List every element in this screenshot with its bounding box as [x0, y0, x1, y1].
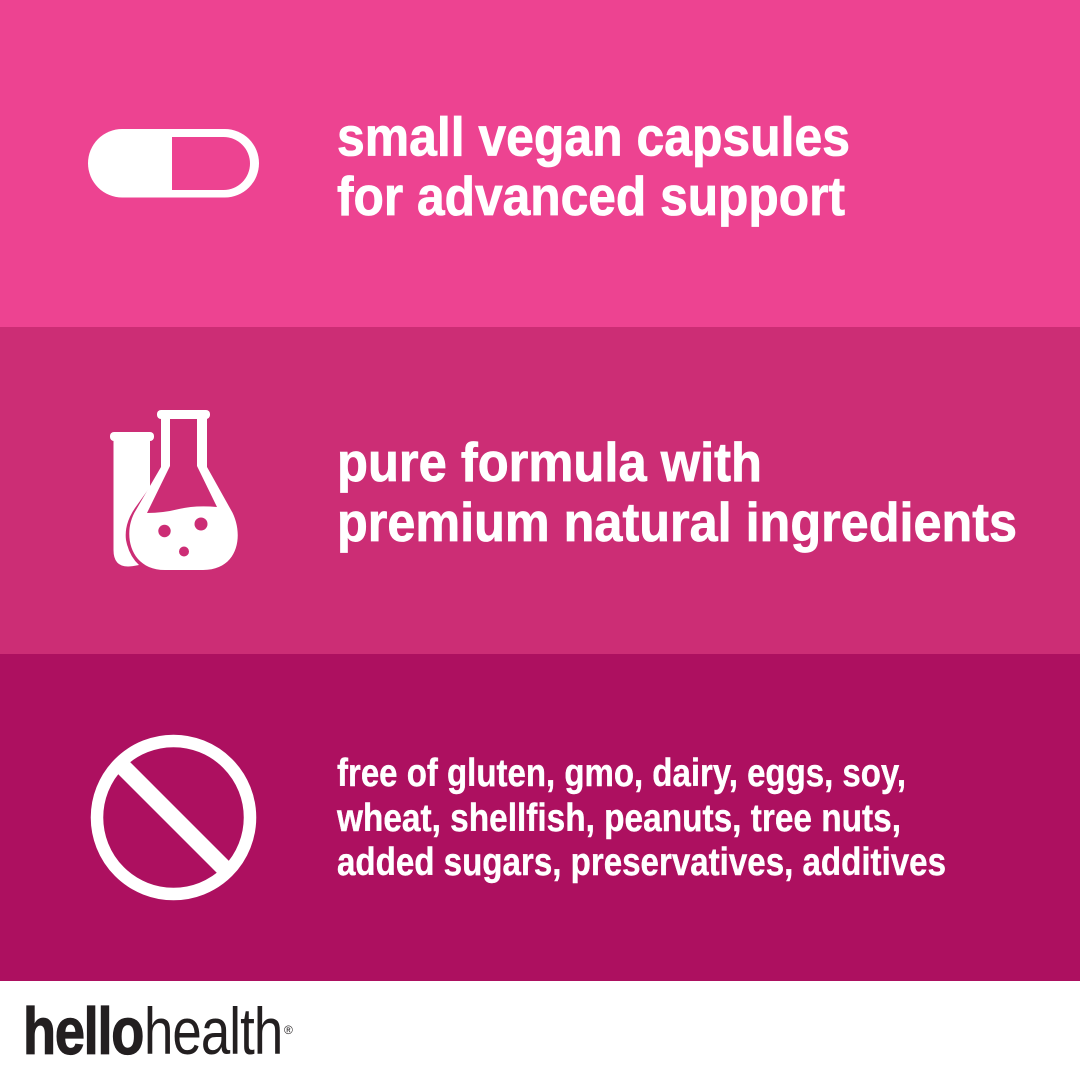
logo: hellohealth wordmark: hello: [23, 994, 144, 1068]
heading: pure formula: premium natural ingredients: [337, 491, 1017, 553]
text: free-from list: [336, 752, 946, 884]
text: free-from list: free of gluten, gmo, dairy, eggs, soy,: [337, 752, 906, 795]
text: free-from list: added sugars, preservatives, additives: [337, 841, 946, 884]
heading: capsules: for advanced support: [337, 165, 845, 227]
icon: prohibition sign: [97, 741, 250, 894]
logo: hellohealth wordmark: health: [144, 994, 283, 1068]
heading: pure formula: pure formula with: [337, 431, 762, 493]
logo: hellohealth wordmark: ®: [284, 1023, 293, 1037]
icon: capsule: [88, 129, 259, 198]
panel: pure formula: [0, 327, 1080, 654]
heading: capsules: [337, 106, 850, 227]
icon: test tube and flask: [110, 410, 238, 570]
heading: pure formula: [337, 431, 1017, 553]
logo: hellohealth wordmark: [23, 994, 293, 1068]
footer: logo: [0, 981, 1080, 1080]
heading: capsules: small vegan capsules: [337, 106, 850, 168]
panel: free of allergens: [0, 654, 1080, 981]
panel: small vegan capsules: [0, 0, 1080, 327]
text: free-from list: wheat, shellfish, peanuts, tree nuts,: [336, 797, 901, 840]
